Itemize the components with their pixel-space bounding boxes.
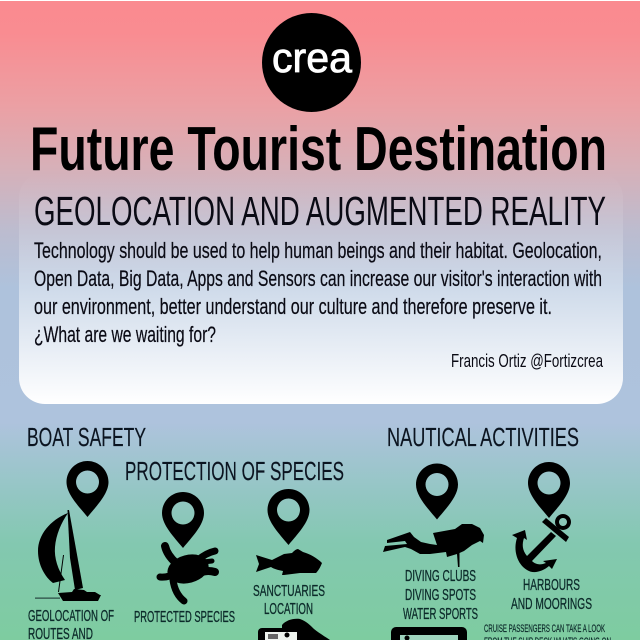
label: protected species: PROTECTED SPECIES: [134, 609, 235, 626]
icon: hand holding phone: [258, 619, 330, 640]
heading: boat safety: BOAT SAFETY: [27, 422, 146, 452]
label: sanctuaries location: LOCATION: [264, 601, 313, 618]
intro text block: [34, 238, 602, 347]
label: geolocation of routes: GEOLOCATION OF: [28, 608, 114, 625]
icon: sea turtle: [160, 546, 215, 601]
label: diving: DIVING CLUBS: [405, 568, 476, 585]
label: diving: [403, 568, 478, 623]
label: sanctuaries location: SANCTUARIES: [253, 583, 325, 600]
label: harbours and moorings: HARBOURS: [523, 577, 580, 594]
label: sanctuaries location: [253, 583, 325, 618]
label: geolocation of routes: [28, 608, 114, 640]
icon: map pin boat safety: [66, 461, 108, 517]
icon: sailboat: [35, 510, 101, 601]
icon: fish: [256, 549, 322, 575]
icon: map pin protected species: [162, 492, 204, 548]
heading: protection of species: PROTECTION OF SPECIES: [125, 456, 344, 486]
logo: crea: crea: [272, 34, 353, 81]
panel: introduction background: [19, 172, 623, 404]
logo: crea: [262, 13, 361, 112]
icon: map pin sanctuaries: [268, 489, 310, 545]
icon: anchor: [512, 514, 571, 572]
text: cruise passengers: [484, 623, 611, 640]
icon: map pin diving: [416, 464, 458, 520]
intro text block: ¿What are we waiting for?: [34, 322, 216, 347]
label: diving: DIVING SPOTS: [405, 587, 476, 604]
label: harbours and moorings: AND MOORINGS: [511, 596, 592, 613]
label: harbours and moorings: [511, 577, 592, 613]
label: diving: WATER SPORTS: [403, 606, 478, 623]
icon: map pin harbours: [528, 462, 570, 518]
icon: tablet: [391, 627, 467, 640]
icon: scuba diver: [383, 524, 484, 567]
